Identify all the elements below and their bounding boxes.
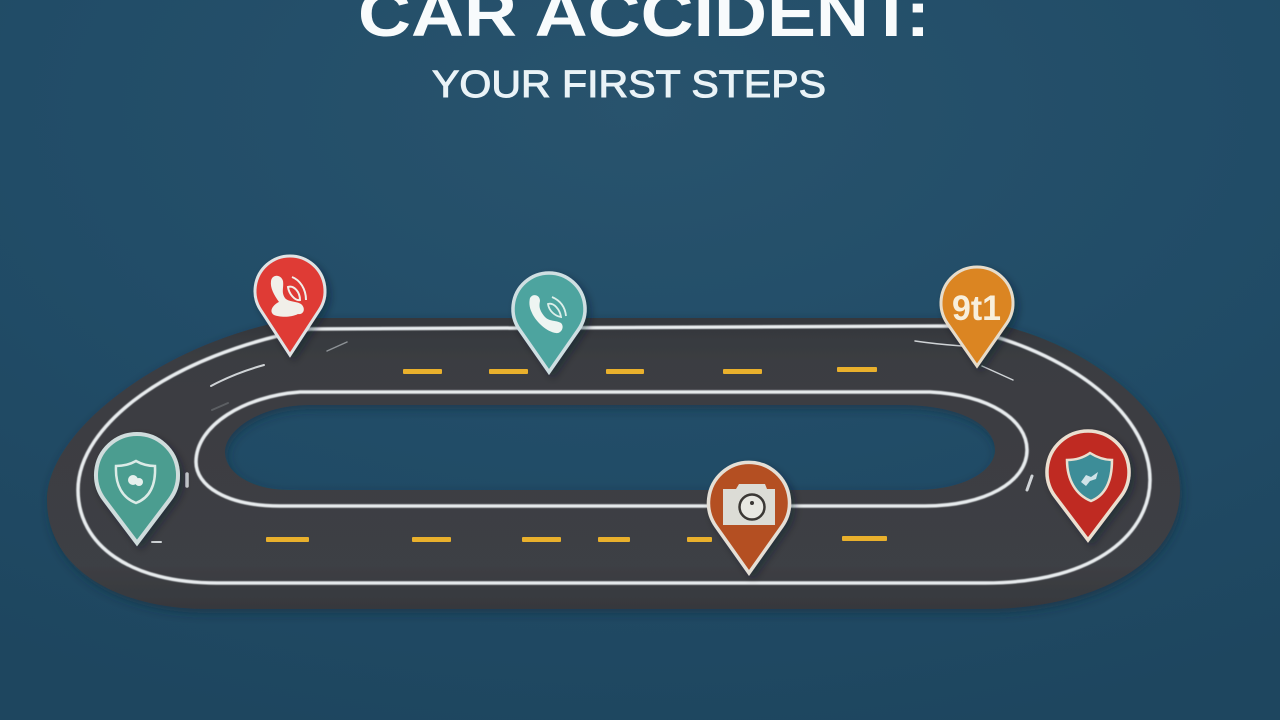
road track [47, 318, 1180, 609]
icon: signal waves [288, 277, 306, 300]
subtitle: YOUR FIRST STEPS [432, 64, 826, 106]
icon: camera [723, 484, 775, 525]
icon: telephone handset [271, 276, 304, 317]
pin: red shield [1047, 431, 1129, 540]
icon: telephone handset [529, 295, 563, 333]
pin: red phone [255, 256, 325, 355]
road surface [47, 318, 1180, 609]
icon: shield outline [116, 461, 155, 503]
pin: orange 911 [941, 267, 1013, 366]
icon: emergency number: 9t1 [952, 289, 1001, 328]
pin: teal phone [513, 273, 585, 372]
inner lane line [196, 392, 1027, 506]
pin: rust camera [708, 462, 790, 573]
yellow dashes, lower lane [266, 536, 887, 542]
icon: signal waves [548, 297, 566, 317]
small road marks [152, 341, 1032, 542]
yellow dashes, upper lane [403, 367, 877, 374]
icon: shield [1067, 453, 1112, 501]
outer lane line [78, 326, 1150, 583]
pin: teal shield [96, 434, 178, 543]
